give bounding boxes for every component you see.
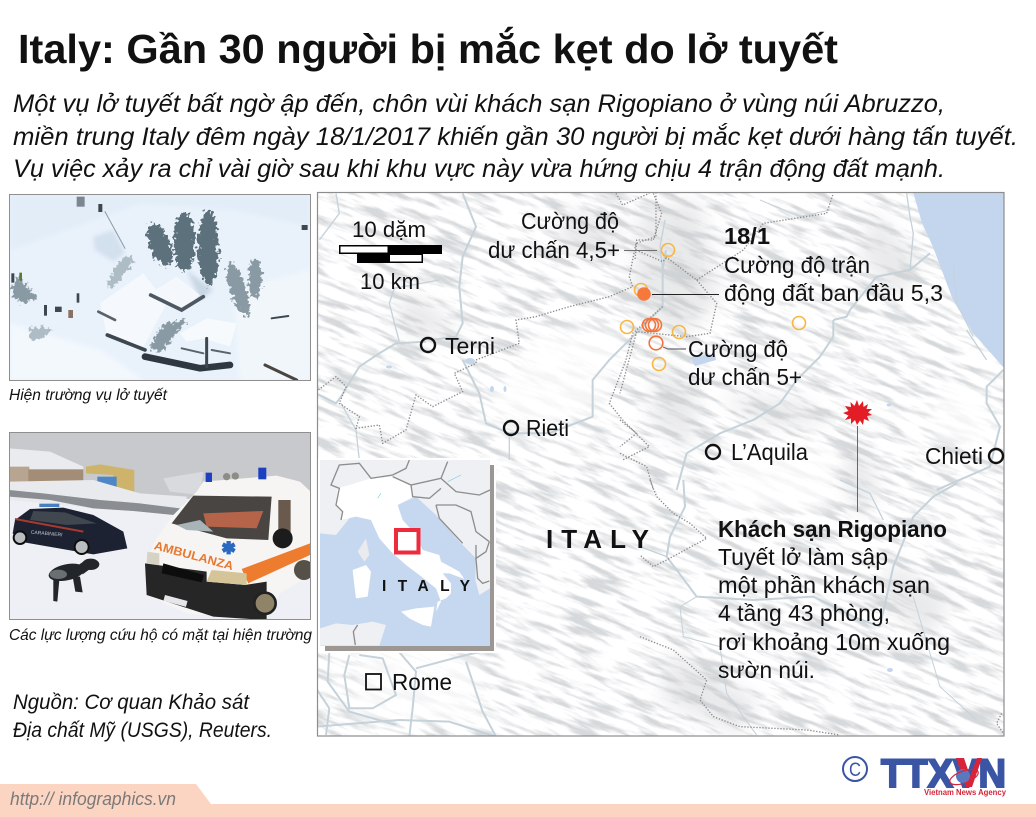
beacons bbox=[206, 473, 212, 482]
city: Terni: Terni bbox=[445, 333, 495, 359]
snow bank and hedge bbox=[10, 480, 187, 502]
city: Rieti: Rieti bbox=[526, 415, 569, 441]
globe bbox=[956, 769, 970, 783]
map panel bbox=[316, 192, 1004, 737]
footer band bbox=[0, 784, 1036, 817]
photo: rescue forces: AMBULANZA bbox=[153, 538, 235, 573]
country label: ITALY bbox=[546, 524, 649, 554]
initial quake marker bbox=[637, 287, 651, 301]
dark building edges bbox=[98, 212, 297, 380]
label: 18/1 initial quake bbox=[724, 223, 943, 306]
label: Rigopiano hotel: sườn núi. bbox=[718, 657, 815, 683]
regional boundaries bbox=[316, 193, 1003, 735]
inset highlight square bbox=[396, 530, 418, 552]
copyright mark: C bbox=[849, 760, 861, 781]
label: aftershock 5+: Cường độ bbox=[688, 336, 788, 362]
city: Rome: Rome bbox=[392, 669, 452, 695]
roofs bbox=[156, 277, 200, 308]
trees bbox=[12, 211, 262, 353]
logo: TTXVN: TTXVN bbox=[881, 752, 1006, 796]
intro text: Một vụ lở tuyết bất ngờ ập đến, chôn vùi khách sạn Rigopiano ở vùng núi Abruzzo, bbox=[13, 90, 945, 118]
inset country label: ITALY bbox=[382, 578, 471, 595]
dog bbox=[47, 559, 99, 602]
rivers bbox=[316, 193, 1003, 737]
scale bar: 10 dặm bbox=[352, 217, 426, 242]
source note: Nguồn: Cơ quan Khảo sát bbox=[13, 691, 250, 714]
snow shading bbox=[12, 230, 212, 378]
photo: rescue forces: CARABINIERI bbox=[30, 530, 63, 538]
scale bar bbox=[339, 217, 442, 294]
city: Terni bbox=[421, 333, 495, 359]
rescuers bbox=[11, 197, 308, 318]
star of life bbox=[223, 541, 235, 554]
lakes bbox=[386, 354, 893, 672]
label: Rigopiano hotel: Tuyết lở làm sập bbox=[718, 544, 888, 570]
terrain shading bbox=[316, 192, 1004, 737]
caption: rescue photo: Các lực lượng cứu hộ có mặt tại hiện trường bbox=[9, 627, 312, 644]
city: L'Aquila: L’Aquila bbox=[731, 439, 808, 465]
label: 18/1 initial quake: động đất ban đầu 5,3 bbox=[724, 280, 943, 306]
ambulance bbox=[145, 476, 311, 620]
label: aftershock 4.5+: dư chấn 4,5+ bbox=[488, 237, 620, 263]
label: Rigopiano hotel: rơi khoảng 10m xuống bbox=[718, 629, 950, 655]
label: Rigopiano hotel: Khách sạn Rigopiano bbox=[718, 516, 947, 542]
source note bbox=[13, 691, 272, 742]
source note: Địa chất Mỹ (USGS), Reuters. bbox=[13, 719, 272, 742]
photo: avalanche scene bbox=[9, 194, 311, 381]
borders bbox=[331, 460, 490, 645]
photo: rescue forces bbox=[9, 432, 314, 620]
city: Rieti bbox=[504, 415, 569, 441]
scale bar: 10 km bbox=[360, 269, 420, 294]
Italy bbox=[336, 477, 464, 612]
label: 18/1 initial quake: Cường độ trận bbox=[724, 252, 870, 278]
label: aftershock 5+ bbox=[688, 336, 802, 390]
sea bbox=[913, 192, 1004, 368]
city: Chieti: Chieti bbox=[925, 443, 983, 469]
orange stripe bbox=[242, 543, 310, 583]
label: aftershock 4.5+: Cường độ bbox=[521, 208, 619, 234]
label: aftershock 4.5+ bbox=[488, 208, 620, 263]
label: Rigopiano hotel: một phần khách sạn bbox=[718, 572, 930, 598]
intro text: miền trung Italy đêm ngày 18/1/2017 khiến gần 30 người bị mắc kẹt dưới hàng tấn tuyết. bbox=[13, 122, 1018, 151]
copyright mark bbox=[843, 757, 867, 781]
label: 18/1 initial quake: 18/1 bbox=[724, 223, 770, 249]
red V bbox=[956, 758, 982, 787]
intro text bbox=[13, 90, 1018, 183]
inset locator map bbox=[318, 458, 496, 653]
lower front bbox=[145, 563, 267, 620]
leader lines bbox=[624, 250, 858, 512]
label: Rigopiano hotel: 4 tầng 43 phòng, bbox=[718, 600, 890, 626]
aftershock markers bbox=[620, 244, 806, 370]
caption: avalanche photo: Hiện trường vụ lở tuyết bbox=[9, 387, 168, 404]
footer url: http:// infographics.vn bbox=[10, 789, 176, 809]
police car bbox=[13, 508, 127, 554]
white clearings bbox=[350, 330, 990, 720]
buildings bbox=[10, 448, 84, 470]
neighbouring land bbox=[320, 460, 490, 558]
label: Rigopiano hotel bbox=[718, 516, 950, 683]
label: aftershock 5+: dư chấn 5+ bbox=[688, 364, 802, 390]
title: Italy: Gần 30 người bị mắc kẹt do lở tuyết bbox=[18, 26, 838, 72]
icon: avalanche burst bbox=[843, 400, 872, 425]
logo: TTXVN: Vietnam News Agency bbox=[924, 787, 1006, 797]
intro text: Vụ việc xảy ra chỉ vài giờ sau khi khu vực này vừa hứng chịu 4 trận động đất mạnh. bbox=[13, 155, 945, 183]
city: Rome bbox=[366, 669, 452, 695]
